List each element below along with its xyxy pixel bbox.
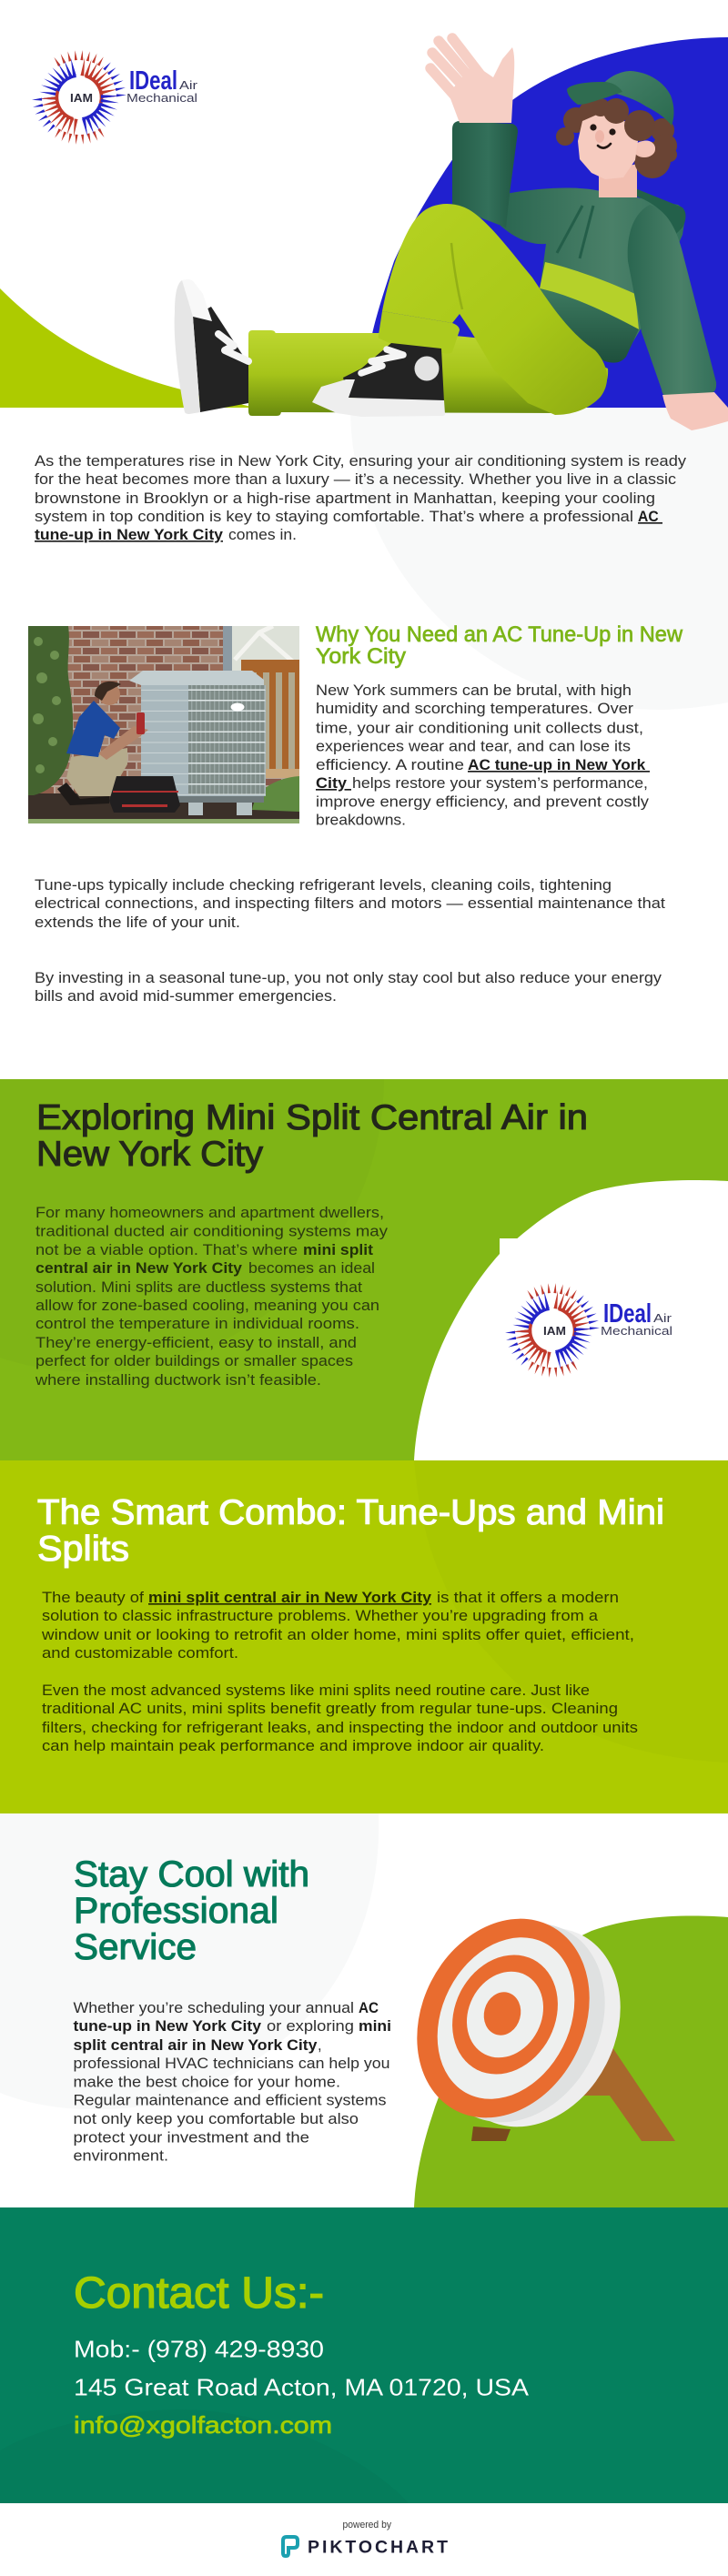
target rings — [384, 1889, 622, 2147]
body text: For many homeowners and apartment dwellers, — [35, 1205, 384, 1221]
back hair — [556, 101, 677, 178]
panel: exploring mini split — [0, 786, 728, 1460]
body text: Whether you’re scheduling your annual — [73, 2000, 354, 2016]
ear front — [642, 140, 655, 150]
section body text: helps restore your system’s performance, — [352, 775, 648, 792]
subtle darker circle — [0, 786, 384, 1372]
footer: powered by Piktochart — [283, 2520, 448, 2557]
text block: tune-up contents — [35, 877, 665, 931]
body text: central air in New York City — [35, 1260, 243, 1277]
flat leg cuff — [248, 330, 281, 416]
cap — [567, 71, 673, 126]
address: 145 Great Road Acton, MA 01720, USA — [74, 2373, 530, 2400]
green background — [0, 1079, 728, 1460]
raised leg cuff — [379, 311, 460, 354]
logo lettering — [71, 70, 197, 102]
text block: tune-up contents: Tune-ups typically include checking refrigerant levels, cleaning coils, tightening — [35, 877, 612, 894]
phone number: Mob:- (978) 429-8930 — [74, 2335, 324, 2362]
raised sleeve — [452, 121, 518, 227]
icon: Piktochart mark — [283, 2537, 298, 2556]
body text: becomes an ideal — [248, 1260, 375, 1277]
body text: modern solution — [41, 1590, 634, 1662]
heading: Exploring Mini Split Central Air in — [36, 1098, 588, 1137]
lime background — [0, 1460, 728, 1813]
heading: Professional — [74, 1891, 278, 1931]
wood fence — [241, 660, 299, 778]
heading: Stay Cool with — [74, 1854, 309, 1894]
body text: modern solution: window unit or looking to retrofit an older home, mini splits offer quiet, efficient, — [41, 1627, 634, 1643]
section body text: time, your air conditioning unit collects dust, — [316, 721, 643, 737]
right arm — [628, 205, 716, 396]
logo lettering: IDeal — [129, 66, 177, 96]
body text: modern solution: is that it offers a modern — [437, 1590, 619, 1606]
body text: or exploring — [267, 2018, 354, 2035]
logo lettering — [543, 1299, 672, 1338]
body text: traditional ducted air conditioning systems may — [35, 1223, 389, 1239]
text block: seasonal investment — [35, 970, 662, 1005]
flat leg — [273, 333, 608, 413]
heading: Contact Us:- — [74, 2269, 324, 2318]
white notch — [500, 1238, 520, 1258]
section body text: humidity and scorching temperatures. Over — [316, 701, 634, 717]
body text: modern solution: The beauty of — [42, 1590, 144, 1606]
section body text: New York summers can be brutal, with high — [316, 682, 632, 699]
hoodie lime band — [540, 262, 639, 329]
shrubs — [252, 776, 299, 812]
body text: mini split — [303, 1242, 374, 1258]
text block: intro: tune-up in New York City — [35, 527, 224, 543]
pale background circle — [350, 408, 728, 710]
section body text: experiences wear and tear, and can lose its — [316, 739, 631, 755]
text block: intro: brownstone in Brooklyn or a high-rise apartment in Manhattan, keeping your cooling — [35, 490, 655, 507]
text block: intro: AC — [638, 509, 662, 525]
body text: routine care: Even the most advanced systems like mini splits need routine care. Just like — [42, 1682, 590, 1699]
downpipe — [223, 626, 232, 672]
technician — [57, 682, 148, 805]
text block: intro: comes in. — [228, 527, 297, 543]
logo lettering: Mechanical — [126, 91, 197, 105]
body text: perfect for older buildings or smaller spaces — [35, 1353, 353, 1369]
logo lettering: IDeal — [603, 1299, 652, 1328]
text block: seasonal investment: By investing in a seasonal tune-up, you not only stay cool but also reduce your energy — [35, 970, 662, 986]
email: info@xgolfacton.com — [74, 2411, 332, 2439]
subtle darker curve — [414, 1460, 728, 1763]
body text: routine care: traditional AC units, mini splits benefit greatly from regular tune-ups. Cleaning — [42, 1701, 618, 1717]
body text: where installing ductwork isn’t feasible. — [35, 1372, 321, 1389]
logo lettering: Mechanical — [601, 1324, 672, 1338]
hoodie lower — [537, 288, 639, 363]
body text: routine care: can help maintain peak performance and improve indoor air quality. — [42, 1738, 544, 1754]
body text: allow for zone-based cooling, meaning you can — [35, 1298, 379, 1314]
blue backdrop shape — [370, 37, 728, 408]
text block: tune-up contents: extends the life of your unit. — [35, 914, 240, 931]
AC unit — [129, 671, 266, 815]
panel: smart combo — [0, 1460, 728, 1813]
soil — [28, 793, 299, 819]
body text: routine care — [42, 1682, 638, 1754]
logo lettering: IAM — [70, 91, 93, 105]
body text: control the temperature in individual rooms. — [35, 1316, 359, 1332]
heading — [74, 1854, 309, 1967]
heading — [37, 1493, 664, 1569]
body text: modern solution: solution to classic infrastructure problems. Whether you’re upgrading from a — [42, 1608, 599, 1624]
logo lettering: Air — [179, 78, 198, 92]
heading: Service — [74, 1927, 197, 1967]
text block: tune-up contents: electrical connections, and inspecting filters and motors — essential maintenance that — [35, 895, 665, 912]
lime corner curve — [0, 288, 255, 408]
resting hand — [662, 392, 728, 430]
ear — [635, 141, 655, 157]
Piktochart wordmark: PIKTOCHART — [308, 2537, 448, 2557]
body text: tune-up in New York City — [73, 2018, 262, 2035]
stand — [471, 2047, 675, 2141]
knee crease — [451, 243, 462, 309]
section body text: City — [316, 775, 351, 792]
green background — [0, 2207, 728, 2503]
tool bag — [109, 776, 180, 813]
logo sunburst — [505, 1283, 600, 1378]
green curved shape — [414, 1916, 728, 2207]
body text: environment. — [73, 2147, 168, 2164]
ivy — [28, 626, 73, 795]
photo: technician servicing outdoor AC unit — [28, 626, 299, 823]
heading — [36, 1098, 588, 1174]
panel: stay cool with professional service — [0, 1813, 728, 2207]
heading: New York City — [36, 1135, 264, 1174]
text block: intro — [35, 453, 687, 543]
body text: modern solution: mini split central air in New York City — [148, 1590, 432, 1606]
body text: mini — [359, 2018, 391, 2035]
body text: AC — [359, 2000, 379, 2016]
section heading: York City — [316, 644, 406, 669]
body text: professional HVAC technicians can help you — [73, 2056, 389, 2072]
panel: contact — [0, 2207, 728, 2503]
logo lettering: Air — [653, 1311, 672, 1325]
body text: split central air in New York City — [73, 2037, 318, 2054]
section heading: Why You Need an AC Tune-Up in New — [316, 622, 683, 647]
logo — [505, 1283, 672, 1378]
heading: Splits — [37, 1530, 129, 1569]
illustration: waving person — [175, 38, 728, 430]
waving hand — [430, 38, 514, 123]
raised leg — [382, 204, 607, 415]
section body text: breakdowns. — [316, 812, 406, 828]
text block: intro: As the temperatures rise in New York City, ensuring your air conditioning system is ready — [35, 453, 687, 470]
white curved shape — [414, 1180, 728, 1460]
body text: They’re energy-efficient, easy to install, and — [35, 1335, 357, 1351]
logo sunburst — [32, 50, 126, 145]
eyes and mouth — [590, 124, 616, 148]
body text — [73, 2000, 391, 2164]
section body text — [316, 682, 650, 828]
subtle darker curve — [0, 2409, 409, 2503]
body text: modern solution: and customizable comfort. — [42, 1645, 238, 1662]
pale background circle — [0, 1813, 379, 2109]
hood — [635, 188, 686, 235]
body text: routine care: filters, checking for refrigerant leaks, and inspecting the indoor and outdoor units — [42, 1720, 638, 1736]
text block: intro: system in top condition is key to staying comfortable. That’s where a professional — [35, 509, 633, 525]
body text: solution. Mini splits are ductless systems that — [35, 1279, 362, 1296]
logo lettering: IAM — [543, 1324, 566, 1338]
target side — [399, 1894, 653, 2157]
section heading — [316, 622, 683, 669]
panel: why you need a tune-up — [28, 622, 683, 828]
face — [578, 111, 638, 179]
section body text: improve energy efficiency, and prevent costly — [316, 793, 650, 810]
body text: not only keep you comfortable but also — [73, 2111, 359, 2127]
powered by label: powered by — [342, 2520, 391, 2531]
icon: target on wooden stand — [384, 1889, 675, 2157]
text block: intro: for the heat becomes more than a luxury — it’s a necessity. Whether you live in a classic — [35, 471, 676, 488]
neck — [599, 164, 637, 197]
front hair — [592, 98, 655, 141]
panel: hero — [0, 33, 728, 430]
hoodie strings — [557, 206, 593, 258]
logo — [32, 50, 198, 145]
section body text: efficiency. A routine — [316, 757, 464, 773]
body text: not be a viable option. That’s where — [35, 1242, 298, 1258]
raised shoe — [312, 343, 445, 417]
body text: protect your investment and the — [73, 2129, 309, 2146]
section body text: AC tune-up in New York — [468, 757, 650, 773]
grass — [28, 819, 299, 823]
body text: Regular maintenance and efficient systems — [73, 2093, 386, 2109]
text block: seasonal investment: bills and avoid mid-summer emergencies. — [35, 988, 337, 1005]
window backdrop — [232, 626, 299, 672]
body text: make the best choice for your home. — [73, 2075, 340, 2091]
body text: , — [318, 2037, 322, 2054]
torso hoodie — [500, 187, 684, 342]
heading: The Smart Combo: Tune-Ups and Mini — [37, 1493, 664, 1532]
body text — [35, 1205, 389, 1389]
far shoe — [175, 279, 248, 414]
